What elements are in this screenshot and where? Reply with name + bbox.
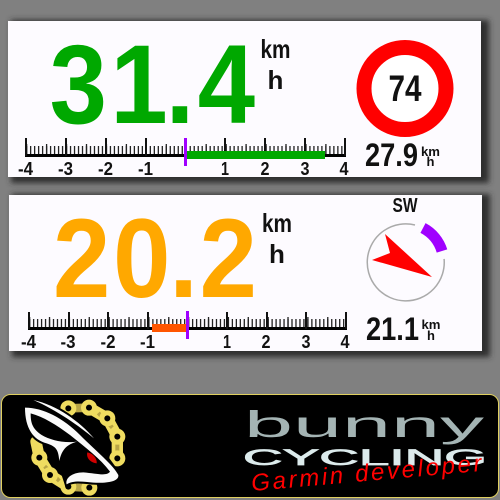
- speed value: 31.4: [50, 22, 255, 147]
- logo: bunny in chain: [25, 400, 125, 496]
- bunny: [25, 400, 118, 484]
- average speed: 21.1: [366, 311, 419, 347]
- compass arrow: [372, 234, 432, 277]
- speed unit: [262, 208, 292, 269]
- ruler labels: 4: [340, 159, 348, 179]
- ruler labels: [18, 159, 348, 179]
- average speed: h: [427, 154, 435, 169]
- ruler: [21, 311, 350, 352]
- ruler labels: 1: [223, 332, 231, 352]
- ruler: [18, 138, 348, 179]
- tagline: Garmin developer: [250, 450, 484, 497]
- ruler labels: -3: [60, 332, 76, 352]
- brand name: bunny: bunny: [244, 404, 485, 445]
- ruler labels: -4: [21, 332, 36, 352]
- ruler labels: [21, 332, 350, 352]
- speed unit: h: [268, 65, 283, 95]
- marker: [184, 138, 187, 166]
- speed unit: km: [262, 208, 292, 238]
- banner: [2, 394, 498, 498]
- panel: current speed orange: [9, 194, 490, 357]
- marker: [186, 311, 189, 339]
- ruler labels: -1: [140, 332, 155, 352]
- ruler labels: 1: [221, 159, 229, 179]
- speed limit sign: 74: [388, 68, 422, 109]
- ruler labels: 4: [340, 332, 350, 352]
- speed value: 20.2: [53, 196, 257, 321]
- compass direction label: SW: [392, 195, 418, 217]
- brand name: cycling: CYCLING: [243, 445, 487, 470]
- ruler labels: 3: [302, 332, 310, 352]
- wind arc: [423, 228, 442, 251]
- panel: current speed green: [8, 20, 489, 183]
- speed unit: km: [260, 34, 290, 64]
- chain: [31, 400, 125, 496]
- average speed: km: [422, 317, 440, 332]
- speed unit: h: [269, 239, 285, 269]
- ruler labels: 2: [262, 332, 270, 352]
- bar: speed difference: [152, 324, 186, 332]
- average speed: km: [421, 144, 440, 159]
- compass: [367, 224, 444, 301]
- speed limit sign: [364, 48, 446, 130]
- ruler labels: 3: [300, 159, 310, 179]
- ruler labels: -2: [98, 159, 113, 179]
- ruler labels: -3: [58, 159, 73, 179]
- speed unit: [260, 34, 290, 95]
- average speed: 27.9: [365, 137, 418, 173]
- average speed: h: [427, 328, 435, 343]
- ruler labels: -1: [138, 159, 153, 179]
- ruler labels: 2: [260, 159, 270, 179]
- bar: speed difference: [185, 151, 325, 159]
- ruler labels: -2: [100, 332, 116, 352]
- ruler labels: -4: [18, 159, 33, 179]
